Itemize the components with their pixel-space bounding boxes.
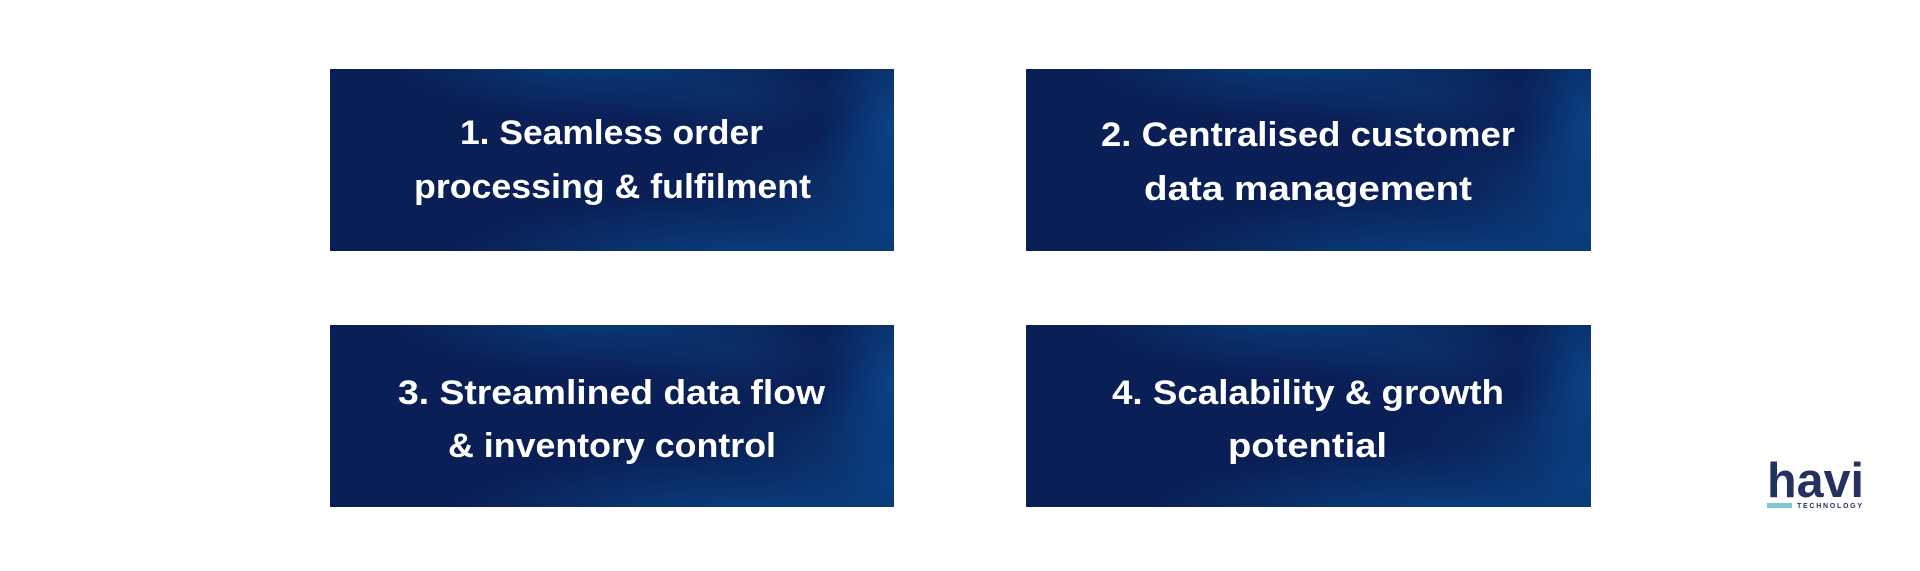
heading: card 4: potential [1228, 427, 1387, 465]
heading: card 3 [398, 374, 826, 465]
heading: card 2: data management [1144, 170, 1472, 208]
heading: card 1 [414, 114, 811, 206]
heading: card 4: 4. Scalability & growth [1112, 374, 1504, 412]
logo: havi technology: havi [1767, 454, 1864, 508]
heading: card 3: & inventory control [448, 427, 776, 465]
heading: card 2: 2. Centralised customer [1101, 116, 1515, 154]
heading: card 1: processing & fulfilment [414, 168, 811, 206]
heading: card 2 [1101, 116, 1515, 208]
heading: card 3: 3. Streamlined data flow [398, 374, 826, 412]
panel: card 3 streamlined data flow [330, 325, 894, 507]
logo: havi technology: TECHNOLOGY [1797, 503, 1862, 510]
heading: card 1: 1. Seamless order [460, 114, 763, 152]
heading: card 4 [1112, 374, 1504, 465]
panel: card 1 seamless order processing [330, 69, 894, 251]
panel: card 2 centralised customer data [1026, 69, 1591, 251]
panel: card 4 scalability and growth [1026, 325, 1591, 507]
